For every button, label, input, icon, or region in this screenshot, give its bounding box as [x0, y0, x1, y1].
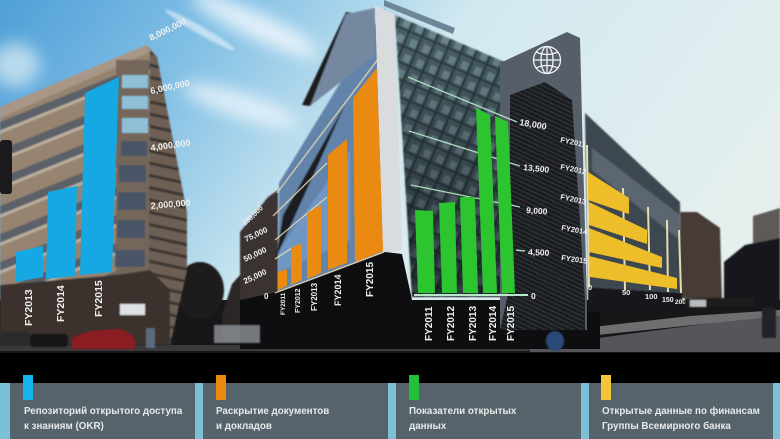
green chart axis labels: FY2014 [488, 306, 499, 341]
icon: World Bank globe logo [534, 46, 560, 74]
yellow chart axis labels: FY2012 [560, 162, 587, 176]
yellow chart axis labels: FY2013 [560, 192, 587, 206]
orange chart axis labels: 50,000 [242, 245, 269, 264]
legend text: Открытые данные по финансам [602, 406, 760, 417]
legend text: Раскрытие документов [216, 406, 329, 417]
bars: open knowledge repository (blue) [16, 77, 119, 282]
green chart axis labels: FY2012 [446, 306, 457, 341]
bars: open data indicators (green) [415, 108, 515, 293]
roof sign strip [384, 0, 455, 34]
green chart axis labels: 9,000 [526, 205, 548, 216]
blue chart axis labels: 2,000,000 [150, 198, 191, 211]
orange chart axis labels: 75,000 [243, 225, 270, 244]
yellow chart axis labels: FY2011 [560, 135, 587, 149]
central building: base [240, 252, 600, 349]
orange chart axis labels: 100,000 [242, 205, 265, 227]
legend swatch yellow [601, 375, 611, 400]
yellow chart gridlines [587, 145, 681, 293]
orange chart axis labels: FY2013 [310, 282, 319, 311]
yellow chart axis labels: 100 [645, 292, 658, 301]
orange chart axis labels [242, 205, 376, 315]
legend panel: knowledge repository [10, 375, 195, 439]
green chart baseline [414, 294, 528, 296]
legend swatch blue [23, 375, 33, 400]
legend text: Репозиторий открытого доступа [24, 406, 182, 417]
green chart axis labels: 18,000 [519, 117, 548, 132]
legend text: Показатели открытых [409, 406, 516, 417]
legend swatch orange [216, 375, 226, 400]
bars: WBG finance open data (yellow) [588, 172, 677, 289]
central building: left wing [276, 8, 385, 292]
green chart axis labels: FY2011 [424, 306, 435, 341]
blue chart axis labels: FY2013 [23, 289, 35, 326]
orange chart axis labels: FY2014 [333, 274, 343, 306]
green chart axis labels: 13,500 [523, 162, 550, 175]
street and ground [0, 300, 780, 355]
left building [0, 45, 187, 345]
blue chart axis labels: 8,000,000 [147, 16, 188, 43]
legend text: Группы Всемирного банка [602, 421, 731, 432]
yellow chart axis labels: FY2014 [561, 223, 589, 237]
yellow chart axis labels: 150 [662, 297, 674, 304]
legend panel: documents [203, 375, 388, 439]
legend panel: indicators [396, 375, 581, 439]
distant buildings and trees [176, 190, 780, 345]
yellow chart axis labels [560, 135, 686, 306]
traffic light [0, 140, 12, 194]
blue chart axis labels: FY2015 [93, 280, 105, 317]
right wing [585, 113, 682, 312]
orange chart axis labels: 0 [264, 292, 269, 301]
green chart axis labels [424, 117, 550, 341]
green chart axis labels: 4,500 [528, 247, 550, 258]
legend panel: finance data [589, 375, 773, 439]
green chart axis labels: 0 [531, 291, 536, 301]
orange chart axis labels: 25,000 [242, 267, 269, 286]
blue chart axis labels [23, 16, 191, 326]
green chart axis labels: FY2015 [506, 306, 517, 341]
yellow chart axis labels: 50 [622, 288, 630, 297]
yellow chart axis labels: FY2015 [561, 253, 588, 266]
central building: white column [375, 5, 402, 254]
orange chart axis labels: FY2015 [365, 262, 376, 297]
yellow chart axis labels: 0 [588, 283, 592, 292]
light blue dividers [0, 383, 780, 439]
bottom black band [0, 353, 780, 439]
legend text: к знаниям (OKR) [24, 421, 104, 432]
legend text: данных [409, 421, 447, 432]
orange chart axis labels: FY2012 [295, 288, 302, 313]
legend text: и докладов [216, 421, 272, 432]
bars: documents and reports (orange) [278, 68, 383, 290]
street scene: cars and people [0, 298, 776, 351]
blue chart axis labels: 6,000,000 [149, 78, 191, 96]
blue chart axis labels: 4,000,000 [150, 138, 191, 153]
green chart gridlines [408, 77, 525, 251]
central building: glass facade [395, 15, 520, 297]
bank tower [500, 32, 587, 330]
green chart axis labels: FY2013 [468, 306, 479, 341]
legend swatch green [409, 375, 419, 400]
orange chart axis labels: FY2011 [280, 292, 287, 315]
blue chart axis labels: FY2014 [55, 285, 67, 322]
orange chart gridlines [273, 50, 385, 293]
yellow chart axis labels: 200 [675, 299, 686, 306]
